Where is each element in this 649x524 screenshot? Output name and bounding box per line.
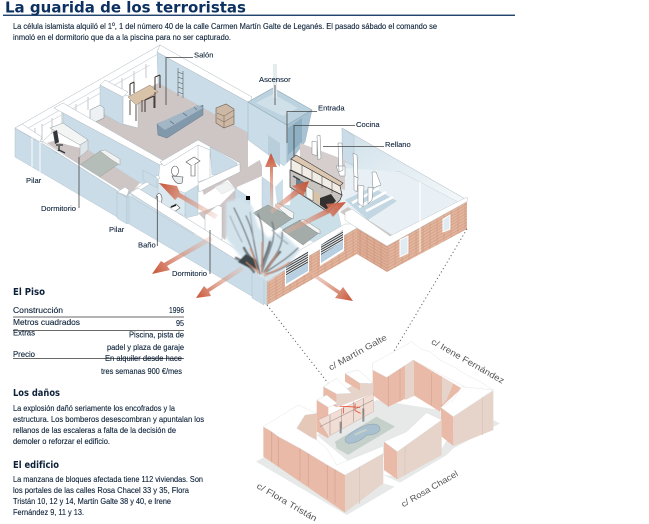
text: Los daños: estructura. Los bomberos desescombran y apuntalan los [13,414,204,424]
data table: Metros cuadrados [13,317,80,327]
data table: padel y plaza de garaje [107,342,184,352]
data table: 1996 [169,305,184,315]
label: Rellano: Rellano [385,140,411,149]
label: Dormitorio left [41,157,79,213]
label: Baño: Baño [138,240,156,250]
street label: c/ Flora Tristán: c/ Flora Tristán [255,481,319,524]
flora tristan courtyard patch [297,413,317,440]
hall strip [340,207,392,243]
street label: c/ Rosa Chacel: c/ Rosa Chacel [399,468,460,509]
text: El edificio: los portales de las calles Rosa Chacel 33 y 35, Flora [13,485,189,495]
label: Dormitorio lower [172,230,210,278]
heading: Los daños: Los daños [13,388,60,399]
label: Salón [166,50,213,105]
data table: Piscina, pista de [129,330,184,340]
label: Dormitorio left: Dormitorio [41,204,76,213]
cutaway building [317,370,373,438]
section: El Piso [13,287,184,376]
stairs [345,187,397,220]
sofa [157,105,203,138]
heading: El edificio: El edificio [13,460,59,471]
label: Rellano [323,140,411,149]
data table [13,305,184,376]
label: Pilar left: Pilar [26,176,42,185]
lift shaft [248,64,312,168]
pillars on front wall [117,187,265,305]
text: El edificio [13,474,203,517]
bedroom with explosion: floors and walls [198,166,342,267]
dotted zoom lines [267,229,467,383]
data table: Extras [13,328,35,338]
flora tristan block [263,405,383,513]
bathroom one [160,140,240,218]
label: Entrada: Entrada [318,104,345,112]
back-right wall of salon [157,52,250,134]
label: Pilar lower: Pilar [109,225,125,234]
beds in front room [253,203,320,245]
street label: c/ Irene Fernández: c/ Irene Fernández [430,336,506,386]
data table: En alquiler desde hace [105,353,182,363]
intro text: inmoló en el dormitorio que da a la piscina para no ser capturado. [13,32,231,42]
desk and chair [50,123,88,157]
landing back wall [342,128,467,203]
label: Entrada [287,104,345,143]
back-left wall with windows [15,45,170,142]
blast arrows [152,153,353,301]
salon and hall floor [90,83,262,190]
label: Ascensor [259,75,291,105]
pool [335,417,395,455]
wall ladder [178,68,183,98]
section: El edificio [13,460,203,517]
text: El edificio: La manzana de bloques afectada tiene 112 viviendas. Son [13,474,203,484]
section: Los daños [13,388,204,446]
street label: c/ Martín Galte: c/ Martín Galte [327,332,389,372]
bed [80,150,120,178]
front-left exterior wall [15,124,267,305]
label: Cocina [294,120,380,157]
label: Ascensor: Ascensor [259,75,291,84]
brick exterior [262,182,468,305]
salon pillar block [100,80,138,128]
right block [373,342,493,446]
bathroom two [130,170,200,235]
text: El edificio: Fernández 9, 11 y 13. [13,507,84,517]
landing floor [330,168,460,243]
block overview illustration [255,332,506,524]
intro text: La célula islamista alquiló el 1º, 1 del número 40 de la calle Carmen Martín Galte de Leganés. El pasado sábado el comando se [13,21,437,31]
windows with blinds [285,215,450,287]
data table: 95 [176,318,184,328]
cutaway illustration of the apartment [15,45,468,305]
ground strips [256,400,500,515]
wall pieces by lift [283,128,354,205]
label: Dormitorio lower: Dormitorio [172,269,207,278]
text: El edificio: Tristán 10, 12 y 14, Martín Galte 38 y 40, e Irene [13,496,171,506]
dining table and chairs [128,75,160,121]
shelf [216,104,234,128]
data table: Precio [13,349,35,359]
label: Cocina: Cocina [356,120,380,129]
small drawer unit [90,105,104,123]
text: Los daños: rellanos de las escaleras a falta de la decisión de [13,425,176,435]
heading: El Piso: El Piso [13,287,45,298]
workers on landing [312,135,381,207]
explosion cloud [226,198,300,282]
text: Los daños: demoler o reforzar el edificio. [13,436,110,446]
partition wall between salon and bedroom [63,107,160,185]
kitchen [290,155,343,212]
rosa chacel block [384,413,442,479]
label: Salón: Salón [194,50,213,60]
data table: Construcción [13,305,63,315]
data table: tres semanas 900 €/mes [101,366,182,376]
intro text [13,21,437,42]
label: Baño [138,196,157,250]
text: Los daños [13,403,204,446]
bedroom floor [47,141,140,197]
text: Los daños: La explosión dañó seriamente los encofrados y la [13,403,175,413]
